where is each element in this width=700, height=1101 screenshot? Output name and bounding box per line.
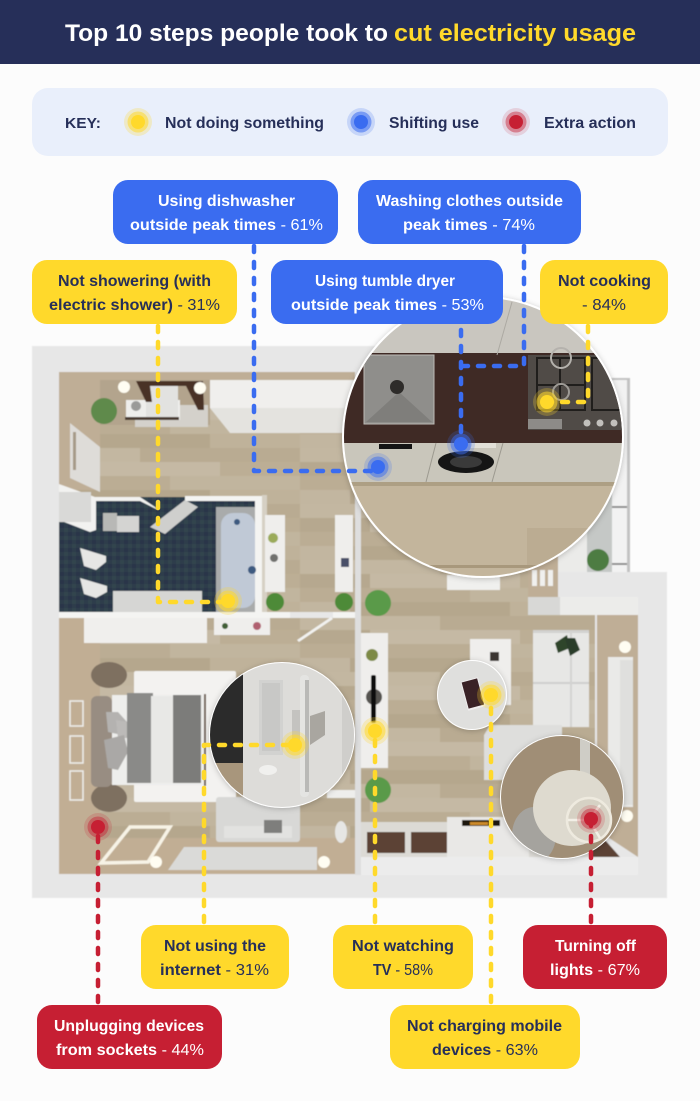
callout: dishwasher: Using dishwasher <box>158 193 295 210</box>
bathroom <box>59 484 355 618</box>
marker: dishwasher <box>364 453 392 481</box>
leader line: sockets <box>96 827 100 1002</box>
callout: dishwasher: outside peak times - 61% <box>130 217 323 234</box>
sink <box>364 355 434 424</box>
callout: lights: lights - 67% <box>550 962 640 979</box>
callout: tumble dryer: outside peak times - 53% <box>291 297 484 314</box>
callout: TV <box>333 925 473 989</box>
balcony window <box>587 378 630 572</box>
header banner with title: Top 10 steps people took to <box>65 20 388 47</box>
legend key panel: Extra action <box>544 115 636 132</box>
floor plan of apartment <box>32 346 667 898</box>
callout: tumble dryer <box>271 260 503 324</box>
gas hob <box>528 348 632 430</box>
callout: cooking <box>540 260 668 324</box>
bedroom furniture <box>70 618 355 870</box>
callout: cooking: - 84% <box>582 297 626 314</box>
callout: TV: TV - 58% <box>373 962 433 979</box>
key marker: extra action <box>502 108 530 136</box>
legend key panel: KEY: <box>65 115 101 132</box>
callout: mobile: devices - 63% <box>432 1042 538 1059</box>
marker: tumble dryer <box>447 430 475 458</box>
hallway and bedroom room shell <box>59 372 355 874</box>
callout: tumble dryer: Using tumble dryer <box>315 273 455 290</box>
callout: showering: Not showering (with <box>58 273 211 290</box>
callout: lights: Turning off <box>555 938 637 955</box>
leader line: cooking <box>547 326 588 402</box>
marker: internet <box>281 731 309 759</box>
marker: TV <box>361 717 389 745</box>
legend key panel: Shifting use <box>389 115 479 132</box>
key marker: shifting use <box>347 108 375 136</box>
leader line: tumble dryer <box>459 330 463 444</box>
callout: sockets: from sockets - 44% <box>56 1042 204 1059</box>
consoles and plants between rooms <box>262 495 353 642</box>
callout: sockets: Unplugging devices <box>54 1018 204 1035</box>
callout: internet: internet - 31% <box>160 962 269 979</box>
magnified circle: kitchen counter <box>342 296 624 578</box>
leader line: dishwasher <box>254 246 378 471</box>
magnified circle: floor lamp <box>500 735 624 859</box>
callout: washing clothes: peak times - 74% <box>403 217 535 234</box>
outer walls <box>32 346 667 898</box>
marker: sockets <box>84 813 112 841</box>
dishwasher and tumble dryer fronts <box>379 443 503 482</box>
leader line: TV <box>373 731 377 922</box>
living room furniture <box>361 575 633 822</box>
callout: dishwasher <box>113 180 338 244</box>
callout: cooking: Not cooking <box>558 273 651 290</box>
callout: sockets <box>37 1005 222 1069</box>
callout: showering <box>32 260 237 324</box>
key marker: not doing something <box>124 108 152 136</box>
callout: washing clothes: Washing clothes outside <box>376 193 563 210</box>
header banner with title: cut electricity usage <box>394 20 636 47</box>
legend key panel: Not doing something <box>165 115 324 132</box>
leader line: showering <box>158 326 228 602</box>
magnified circle: computer desk <box>209 662 355 808</box>
callout: lights <box>523 925 667 989</box>
callout: mobile <box>390 1005 580 1069</box>
marker: mobile <box>477 681 505 709</box>
callout: washing clothes <box>358 180 581 244</box>
callout: internet: Not using the <box>164 938 266 955</box>
callout: internet <box>141 925 289 989</box>
leader line: internet <box>204 745 295 922</box>
living room shell <box>355 480 638 875</box>
bottom kitchenette units <box>361 817 638 875</box>
callout: TV: Not watching <box>352 938 454 955</box>
magnified circle: phone on table <box>437 660 507 730</box>
leader line: washing clothes <box>461 246 524 366</box>
marker: lights <box>577 805 605 833</box>
marker: shower <box>214 587 242 615</box>
leader line: lights <box>589 819 593 922</box>
marker: cooking <box>533 388 561 416</box>
legend key panel <box>32 88 668 156</box>
leader line: mobile <box>489 695 493 1002</box>
callout: showering: electric shower) - 31% <box>49 297 220 314</box>
header banner with title <box>0 0 700 64</box>
callout: mobile: Not charging mobile <box>407 1018 562 1035</box>
hallway furniture <box>70 380 355 492</box>
